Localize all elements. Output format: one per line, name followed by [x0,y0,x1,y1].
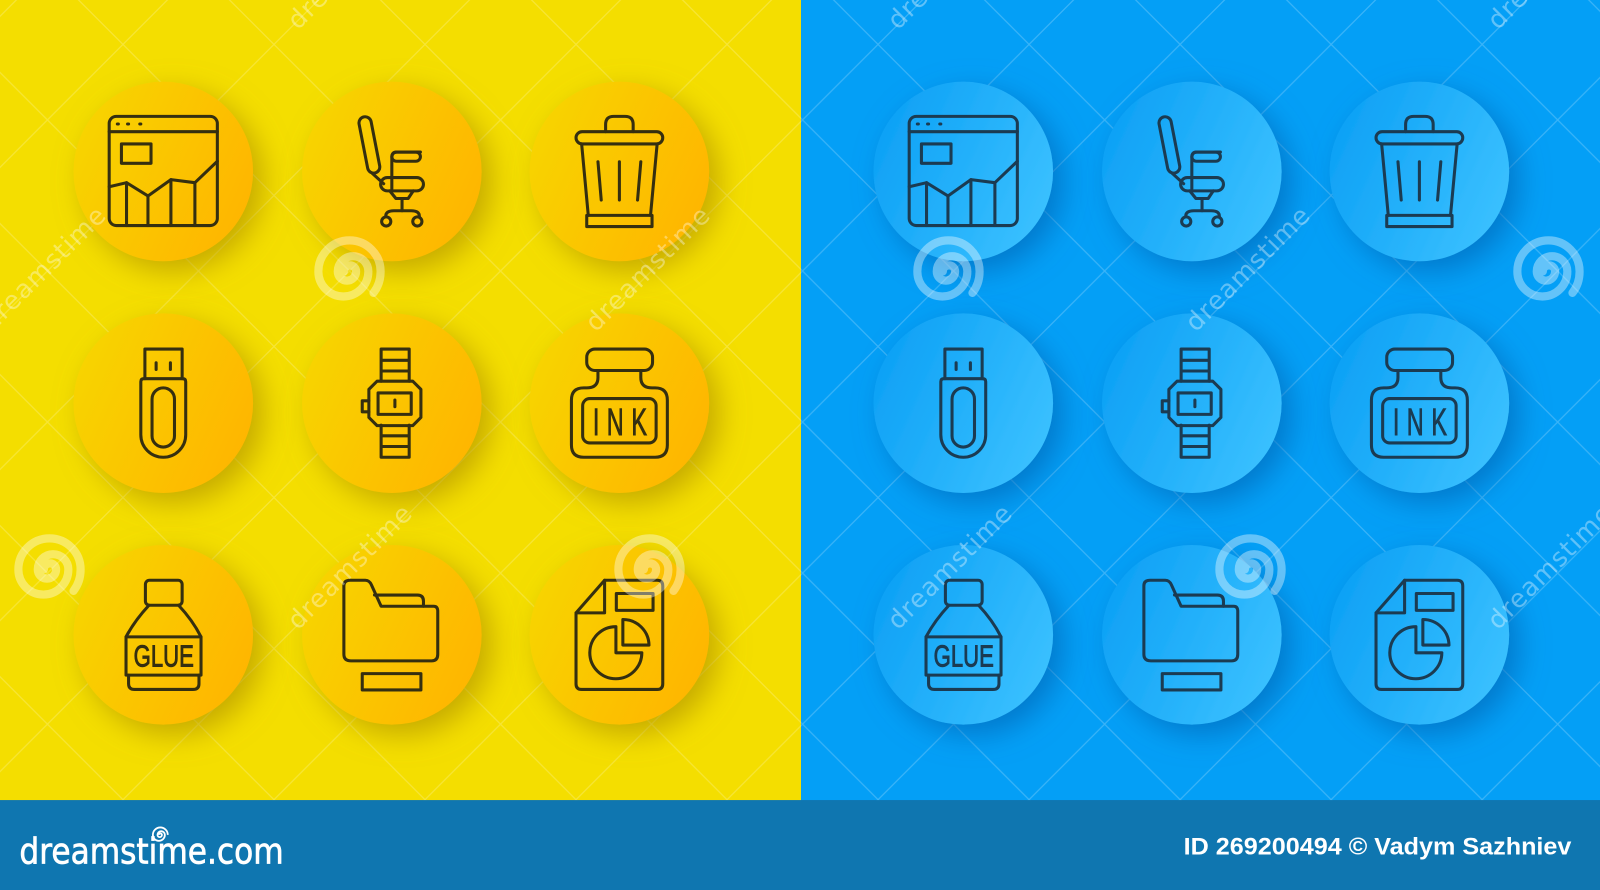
watermarks: spirals and stock text: dreamstime [580,201,716,338]
icon: glue bottle (blue): GLUE [934,639,994,673]
logo: dreamstime.com: dreamstime.com [19,831,284,872]
credit line: ID 269200494 © Vadym Sazhniev [1184,833,1572,860]
watermarks: spirals and stock text: dreamstime [882,499,1018,636]
icon: ink bottle [530,313,709,493]
icon: office chair [302,82,482,261]
icon: USB flash drive [73,313,253,493]
panel: blue icon set [801,0,1600,800]
icon: trash bin [530,82,709,261]
icon: document with pie chart [530,545,709,725]
icon: ink bottle (blue): INK [1393,401,1447,443]
icon: office chair (blue) [1102,82,1282,261]
panel: yellow icon set [0,0,801,800]
icon: glue bottle: GLUE [134,639,194,673]
icon: ink bottle: INK [593,401,647,443]
icon: USB flash drive (blue) [873,313,1053,493]
icon: folder (blue) [1102,545,1282,725]
footer banner [0,800,1600,890]
icon: glue bottle [73,545,253,725]
icon: wristwatch (blue) [1102,313,1282,493]
watermarks: spirals and stock text: dreamstime [1180,201,1316,338]
icon: browser window with area chart (blue) [873,82,1053,261]
icon: browser window with area chart [73,82,253,261]
icon: glue bottle (blue) [873,545,1053,725]
watermarks: spirals and stock text [0,0,1600,636]
watermarks: spirals and stock text: dreamstime [282,499,418,636]
icon: trash bin (blue) [1330,82,1509,261]
icon: wristwatch [302,313,482,493]
icon: ink bottle (blue) [1330,313,1509,493]
icon: folder [302,545,482,725]
icon: document with pie chart (blue) [1330,545,1509,725]
